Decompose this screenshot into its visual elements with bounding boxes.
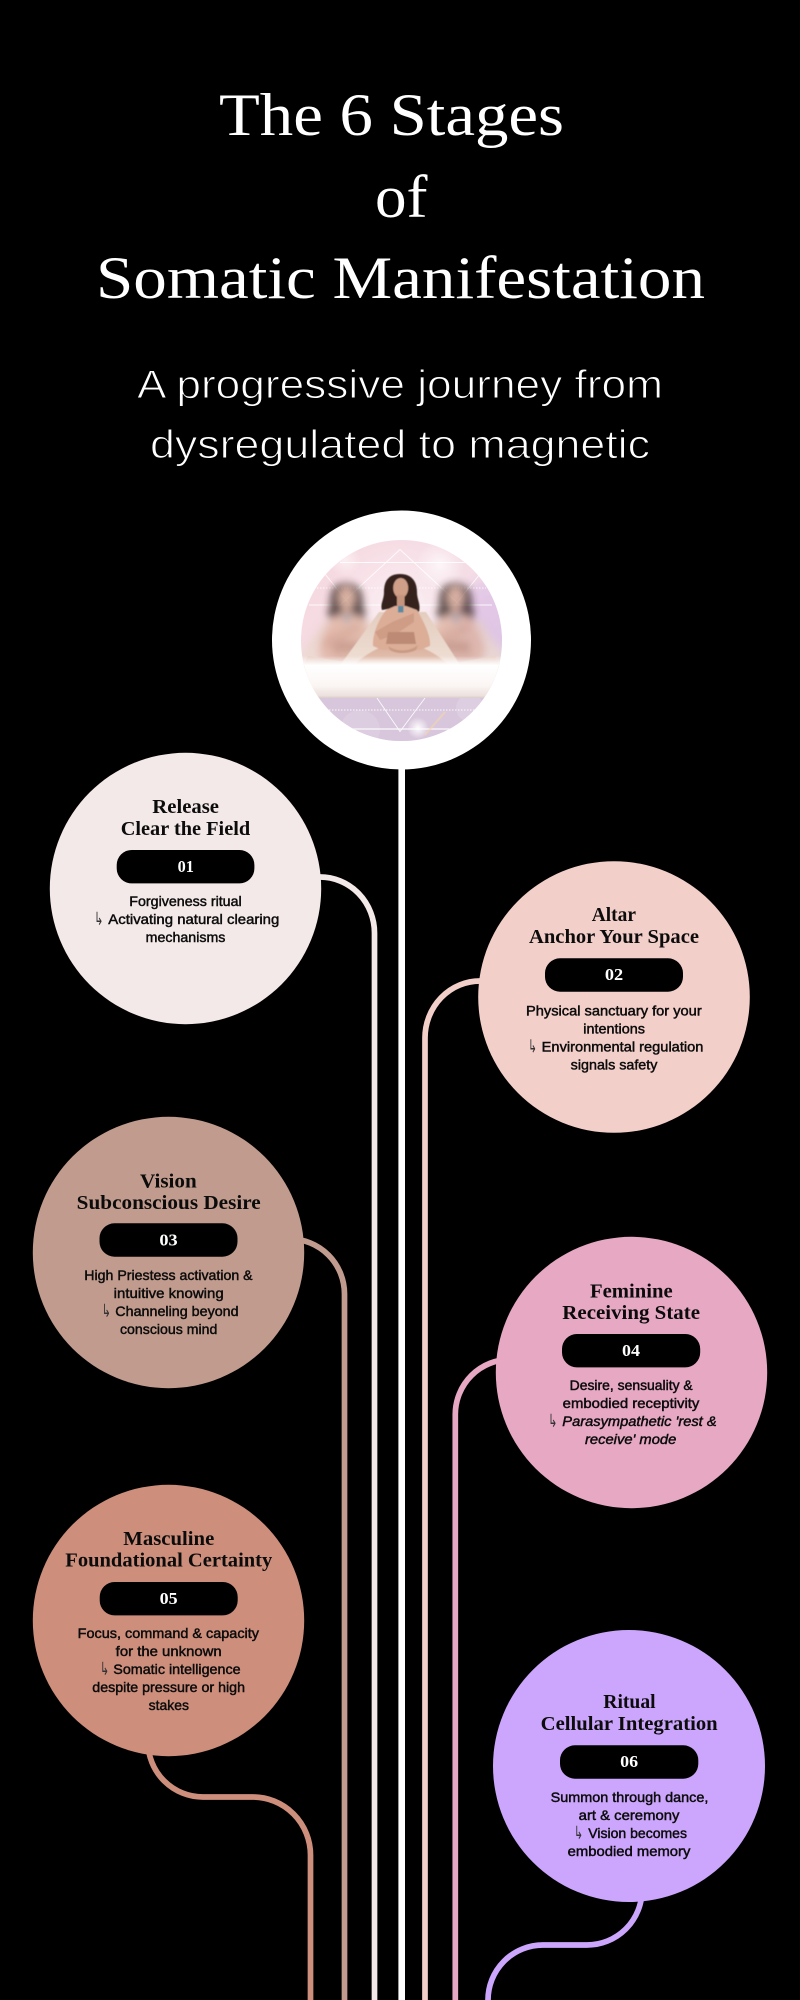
number pill [100, 1223, 238, 1257]
number pill: 01 [178, 857, 194, 876]
description: Summon through dance, [551, 1790, 708, 1805]
heading: Anchor Your Space [529, 926, 699, 948]
heading [121, 796, 251, 840]
description: embodied receptivity [563, 1396, 699, 1411]
number pill [562, 1334, 700, 1367]
description: Channeling beyond [115, 1304, 239, 1319]
heading: Altar [592, 904, 636, 926]
description: intuitive knowing [114, 1286, 224, 1301]
connector: stage 5 line [148, 1742, 310, 2000]
description: Desire, sensuality & [570, 1378, 693, 1393]
heading: Masculine [123, 1528, 214, 1550]
description: embodied memory [568, 1844, 690, 1859]
description: art & ceremony [579, 1808, 680, 1823]
description: receive' mode [585, 1432, 677, 1447]
description: Physical sanctuary for your [526, 1004, 702, 1018]
number pill: 03 [159, 1230, 178, 1250]
panel: stage 05 Masculine [33, 1485, 304, 1756]
description: ↳ [102, 1301, 111, 1322]
description: Activating natural clearing [108, 912, 279, 927]
title: of [375, 164, 428, 230]
circle [478, 861, 750, 1133]
heading: Clear the Field [121, 818, 251, 840]
title [96, 82, 705, 311]
subtitle: dysregulated to magnetic [150, 423, 650, 467]
heading [65, 1528, 273, 1572]
description: mechanisms [146, 930, 225, 945]
heading [77, 1170, 261, 1214]
heading: Subconscious Desire [77, 1192, 261, 1214]
description [526, 1004, 703, 1072]
description: intentions [583, 1022, 645, 1036]
description: for the unknown [116, 1644, 222, 1659]
description: Environmental regulation [542, 1040, 703, 1054]
description: High Priestess activation & [84, 1268, 253, 1283]
description: ↳ [548, 1411, 557, 1432]
number pill [560, 1745, 698, 1779]
description: Forgiveness ritual [129, 894, 242, 909]
description [551, 1790, 708, 1859]
heading [541, 1691, 718, 1735]
circle [50, 753, 321, 1024]
description: Parasympathetic 'rest & [562, 1414, 717, 1429]
panel: stage 06 Ritual [493, 1630, 765, 1902]
title: The 6 Stages [219, 82, 564, 148]
heading [529, 904, 699, 948]
connector: central trunk line [398, 760, 405, 2000]
number pill [100, 1582, 238, 1615]
description: signals safety [571, 1058, 658, 1072]
description: Somatic intelligence [113, 1662, 241, 1677]
description [548, 1378, 717, 1447]
heading: Release [152, 796, 219, 818]
heading: Receiving State [562, 1302, 700, 1324]
description: despite pressure or high [92, 1680, 245, 1695]
number pill [545, 958, 683, 992]
description: ↳ [574, 1823, 583, 1844]
description [84, 1268, 253, 1337]
circle [496, 1237, 767, 1508]
description: conscious mind [120, 1322, 217, 1337]
hero medallion [272, 510, 531, 770]
heading: Foundational Certainty [65, 1550, 273, 1572]
title: Somatic Manifestation [96, 245, 705, 311]
number pill [117, 850, 254, 883]
panel: stage 03 Vision [33, 1117, 304, 1388]
number pill: 02 [605, 965, 623, 984]
panel: stage 01 Release [50, 753, 321, 1024]
description: stakes [149, 1698, 189, 1713]
circle [493, 1630, 765, 1902]
description: Focus, command & capacity [78, 1626, 259, 1641]
circle [33, 1117, 304, 1388]
connector: stage 2 line [425, 981, 480, 2000]
description [78, 1626, 259, 1713]
circle [33, 1485, 304, 1756]
panel: stage 02 Altar [478, 861, 750, 1133]
description: ↳ [100, 1659, 109, 1680]
number pill: 05 [160, 1589, 178, 1608]
illustration: three meditating figures [301, 540, 502, 741]
description [94, 894, 279, 945]
connector: stage 3 line [290, 1239, 344, 2000]
heading: Cellular Integration [541, 1713, 718, 1735]
white ring [272, 510, 531, 770]
subtitle [137, 363, 663, 467]
description: ↳ [94, 909, 103, 930]
heading: Vision [140, 1170, 197, 1192]
description: Vision becomes [588, 1826, 687, 1841]
connector: stage 6 line [488, 1890, 642, 2000]
number pill: 06 [620, 1752, 638, 1771]
connector: stage 1 line [320, 877, 374, 2000]
connector: stage 4 line [455, 1360, 510, 2000]
panel: stage 04 Feminine [496, 1237, 767, 1508]
heading: Feminine [590, 1280, 673, 1302]
description: ↳ [528, 1036, 537, 1058]
heading: Ritual [603, 1691, 656, 1713]
number pill: 04 [622, 1341, 641, 1360]
subtitle: A progressive journey from [137, 363, 663, 407]
heading [562, 1280, 700, 1324]
